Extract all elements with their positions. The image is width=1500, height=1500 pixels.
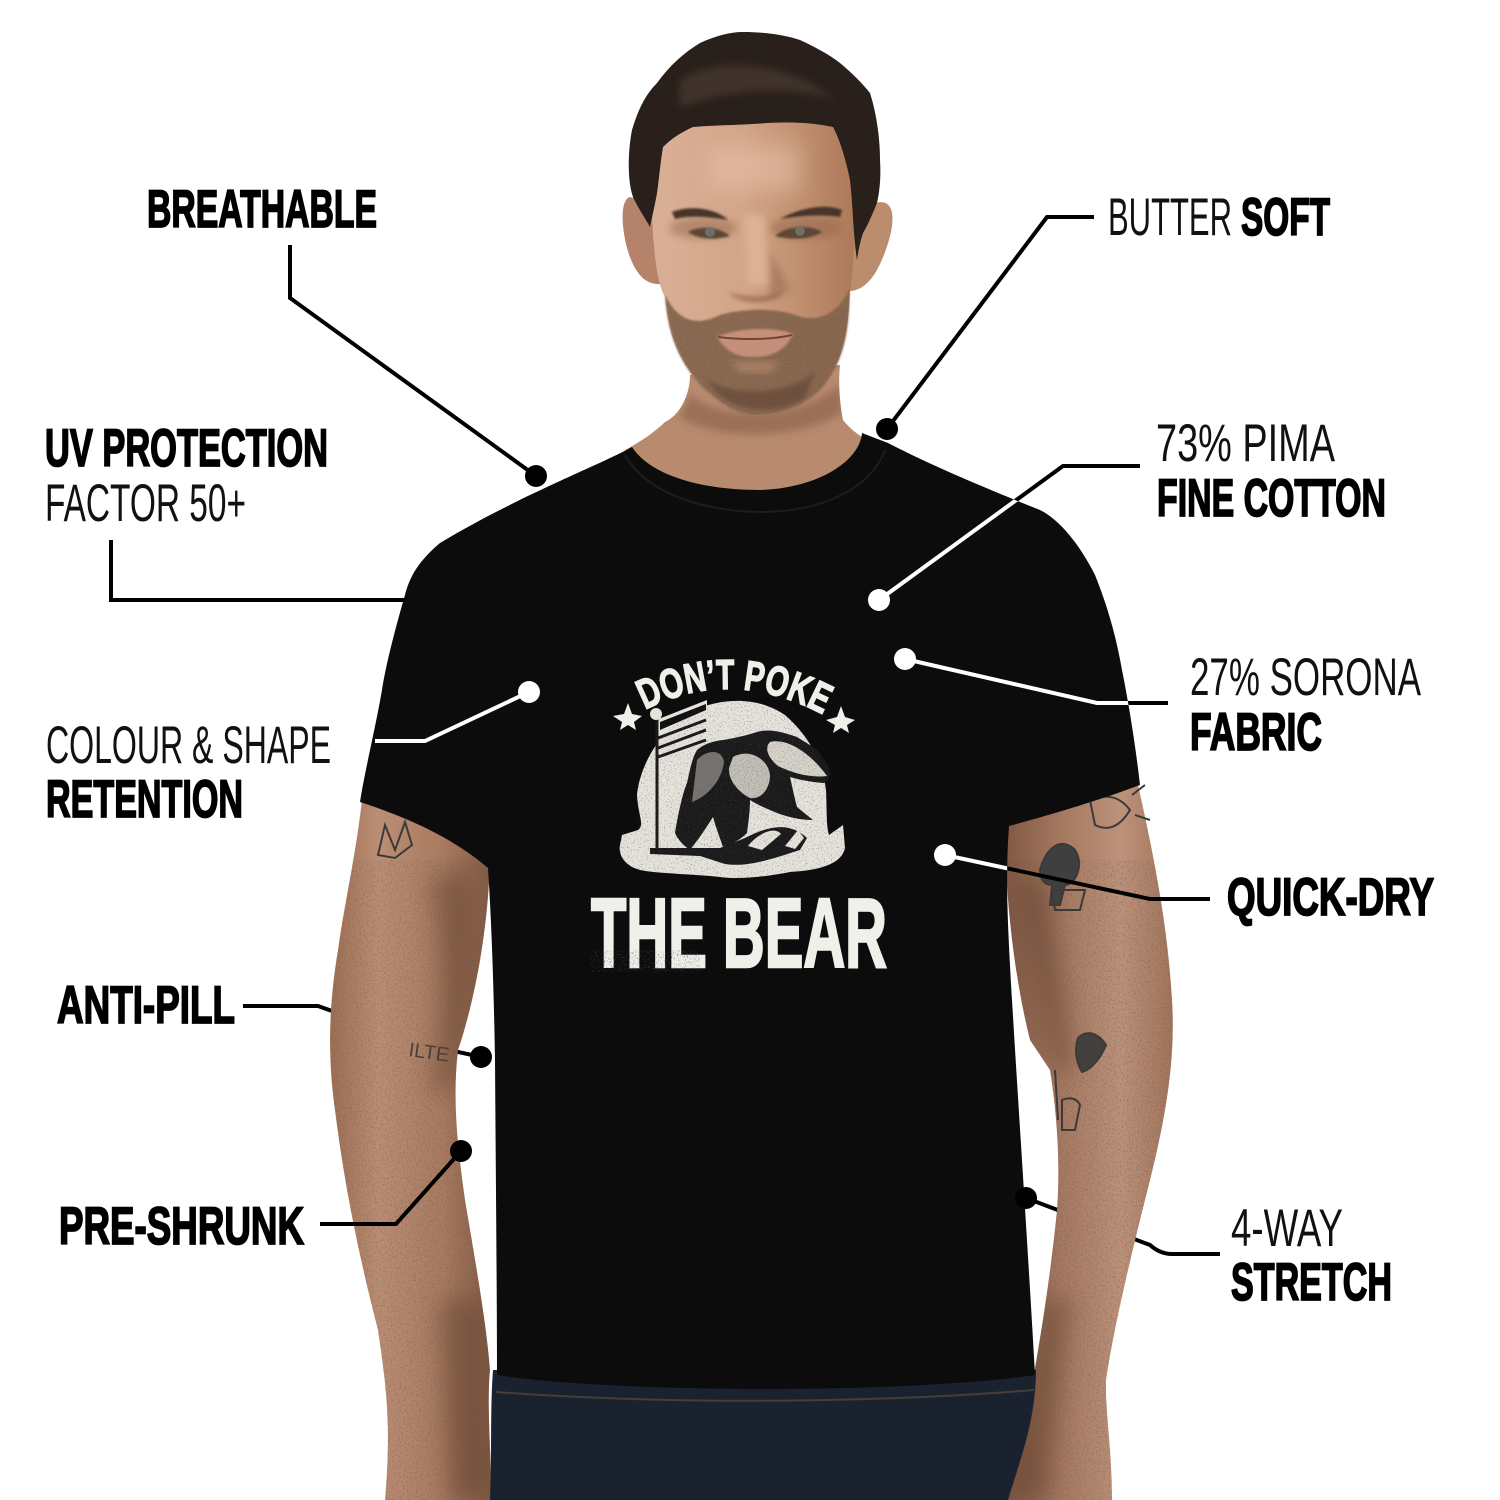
lips xyxy=(717,329,793,357)
hands and jeans xyxy=(490,1370,1036,1500)
print: don't poke arc text: DON’T POKE xyxy=(634,659,835,715)
print: flag xyxy=(650,700,707,848)
callout: quick-dry xyxy=(934,844,1434,927)
callout: butter soft xyxy=(876,188,1330,440)
tattoos: ILTE xyxy=(407,1039,451,1067)
left arm xyxy=(330,800,492,1500)
forehead highlight xyxy=(710,145,800,190)
callout: uv protection xyxy=(45,419,405,600)
man figure xyxy=(320,32,1180,1500)
callout: sorona fabric xyxy=(894,648,1421,762)
callout: uv protection: UV PROTECTION xyxy=(45,419,328,478)
callout: colour and shape retention: COLOUR & SHAPE xyxy=(46,716,331,775)
callout: uv protection: FACTOR 50+ xyxy=(45,474,246,533)
ears xyxy=(623,197,662,284)
callout: butter soft: SOFT xyxy=(1241,188,1330,247)
t-shirt xyxy=(360,433,1140,1389)
neck xyxy=(625,365,880,500)
print: bear xyxy=(650,731,830,865)
callout: sorona fabric: FABRIC xyxy=(1190,703,1322,762)
eyes and brows xyxy=(672,208,728,220)
callout: pima cotton xyxy=(868,414,1386,611)
shirt print: don't poke the bear xyxy=(590,659,888,988)
callout: butter soft: BUTTER xyxy=(1108,188,1232,247)
print: the bear text: THE BEAR xyxy=(591,878,887,988)
callout: pre-shrunk: PRE-SHRUNK xyxy=(59,1197,304,1256)
eye socket shading xyxy=(669,217,841,300)
callout: pima cotton: 73% PIMA xyxy=(1156,414,1335,473)
callout: 4-way stretch: STRETCH xyxy=(1231,1253,1392,1312)
callout: pre-shrunk xyxy=(59,1140,472,1256)
face xyxy=(652,105,854,416)
right arm xyxy=(1000,785,1173,1500)
callout: colour and shape retention xyxy=(46,681,540,829)
callout: breathable xyxy=(147,180,547,487)
beard xyxy=(665,290,849,416)
tattoos xyxy=(378,770,1150,1130)
callout: 4-way stretch xyxy=(1015,1187,1392,1312)
callout: anti-pill: ANTI-PILL xyxy=(57,976,235,1035)
nose xyxy=(728,290,784,302)
print: distressed lower edge xyxy=(591,950,700,972)
hair xyxy=(629,32,880,260)
print: moon and ground xyxy=(620,701,845,878)
callout: colour and shape retention: RETENTION xyxy=(46,770,243,829)
callout: 4-way stretch: 4-WAY xyxy=(1231,1199,1343,1258)
arm shading xyxy=(320,860,1180,1500)
callout: breathable: BREATHABLE xyxy=(147,180,377,239)
black callout line segments behind the figure xyxy=(243,1006,1220,1254)
callout: anti-pill xyxy=(57,976,492,1068)
print: stars xyxy=(613,703,855,733)
print: grain xyxy=(620,701,845,878)
arm hair texture xyxy=(330,860,490,1500)
